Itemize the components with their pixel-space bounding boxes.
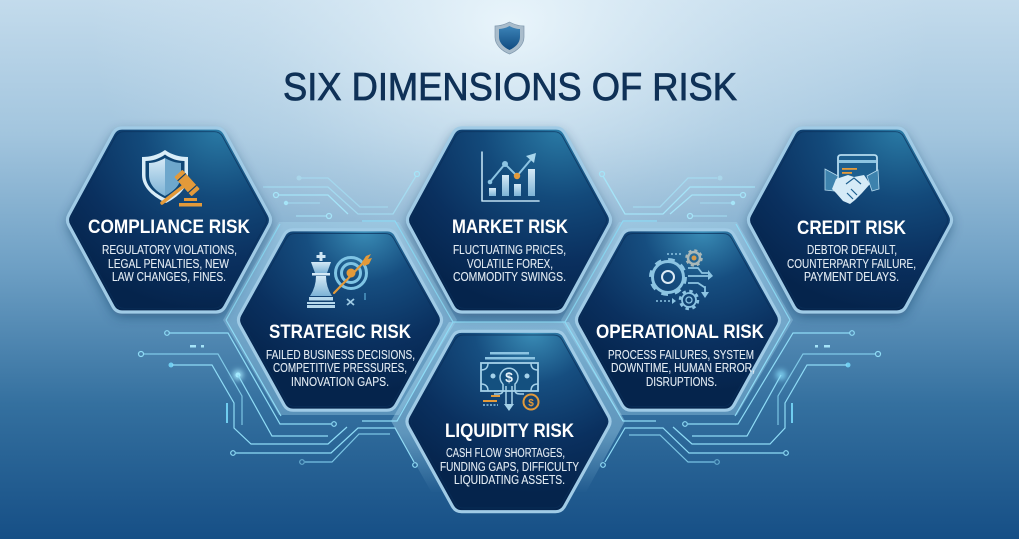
text: market description — [453, 243, 566, 284]
text: liquidity description: LIQUIDATING ASSETS. — [454, 473, 565, 487]
heading: operational risk: OPERATIONAL RISK — [596, 322, 764, 343]
text: market description: COMMODITY SWINGS. — [453, 270, 566, 284]
panel: strategic risk — [238, 230, 442, 410]
text: credit description: PAYMENT DELAYS. — [804, 270, 899, 284]
circuit lines: lower left — [138, 331, 417, 467]
panel: liquidity risk — [407, 331, 610, 512]
heading: market risk: MARKET RISK — [452, 217, 568, 238]
panel: operational risk — [576, 230, 780, 410]
text: market description: FLUCTUATING PRICES, — [453, 243, 566, 257]
text: compliance description: LAW CHANGES, FINES. — [112, 270, 226, 284]
icon: cash flow: $ — [528, 398, 534, 409]
connector band network — [223, 221, 793, 523]
text: credit description: DEBTOR DEFAULT, — [807, 243, 897, 257]
icon: market chart — [482, 152, 539, 201]
text: credit description — [787, 243, 916, 284]
circuit lines: upper right — [600, 172, 755, 218]
circuit lines: lower right — [601, 331, 880, 467]
icon: title shield — [495, 22, 524, 54]
text: operational description: PROCESS FAILURES, SYSTEM — [608, 348, 754, 362]
text: market description: VOLATILE FOREX, — [467, 257, 553, 271]
icon: cash flow: $ — [505, 369, 513, 385]
panel: credit risk — [748, 128, 952, 316]
icon: chess king and target — [307, 252, 372, 308]
text: operational description — [608, 348, 755, 389]
text: strategic description: FAILED BUSINESS DECISIONS, — [266, 348, 415, 362]
text: compliance description: LEGAL PENALTIES, NEW — [108, 257, 229, 271]
icon: shield and gavel — [142, 150, 202, 206]
text: compliance description: REGULATORY VIOLATIONS, — [102, 243, 237, 257]
icon: gears and arrows — [651, 250, 713, 309]
panel: compliance risk — [67, 128, 271, 316]
title: SIX DIMENSIONS OF RISK — [283, 66, 737, 109]
heading: liquidity risk: LIQUIDITY RISK — [445, 421, 574, 442]
panel: market risk — [407, 128, 611, 316]
text: liquidity description: CASH FLOW SHORTAGES, — [446, 446, 565, 460]
circuit lines: upper left — [263, 172, 420, 218]
text: liquidity description: FUNDING GAPS, DIFFICULTY — [440, 460, 580, 474]
icon: cash flow — [481, 352, 538, 411]
heading: strategic risk: STRATEGIC RISK — [269, 322, 411, 343]
text: liquidity description — [440, 446, 580, 487]
icon: card and handshake — [825, 155, 879, 204]
text: credit description: COUNTERPARTY FAILURE, — [787, 257, 916, 271]
heading: credit risk: CREDIT RISK — [797, 218, 906, 239]
heading: compliance risk: COMPLIANCE RISK — [88, 217, 250, 238]
text: strategic description — [266, 348, 415, 389]
text: compliance description — [102, 243, 237, 284]
text: strategic description: COMPETITIVE PRESSURES, — [273, 361, 407, 375]
text: operational description: DOWNTIME, HUMAN ERROR, — [611, 361, 755, 375]
text: strategic description: INNOVATION GAPS. — [291, 375, 389, 389]
text: operational description: DISRUPTIONS. — [646, 375, 717, 389]
